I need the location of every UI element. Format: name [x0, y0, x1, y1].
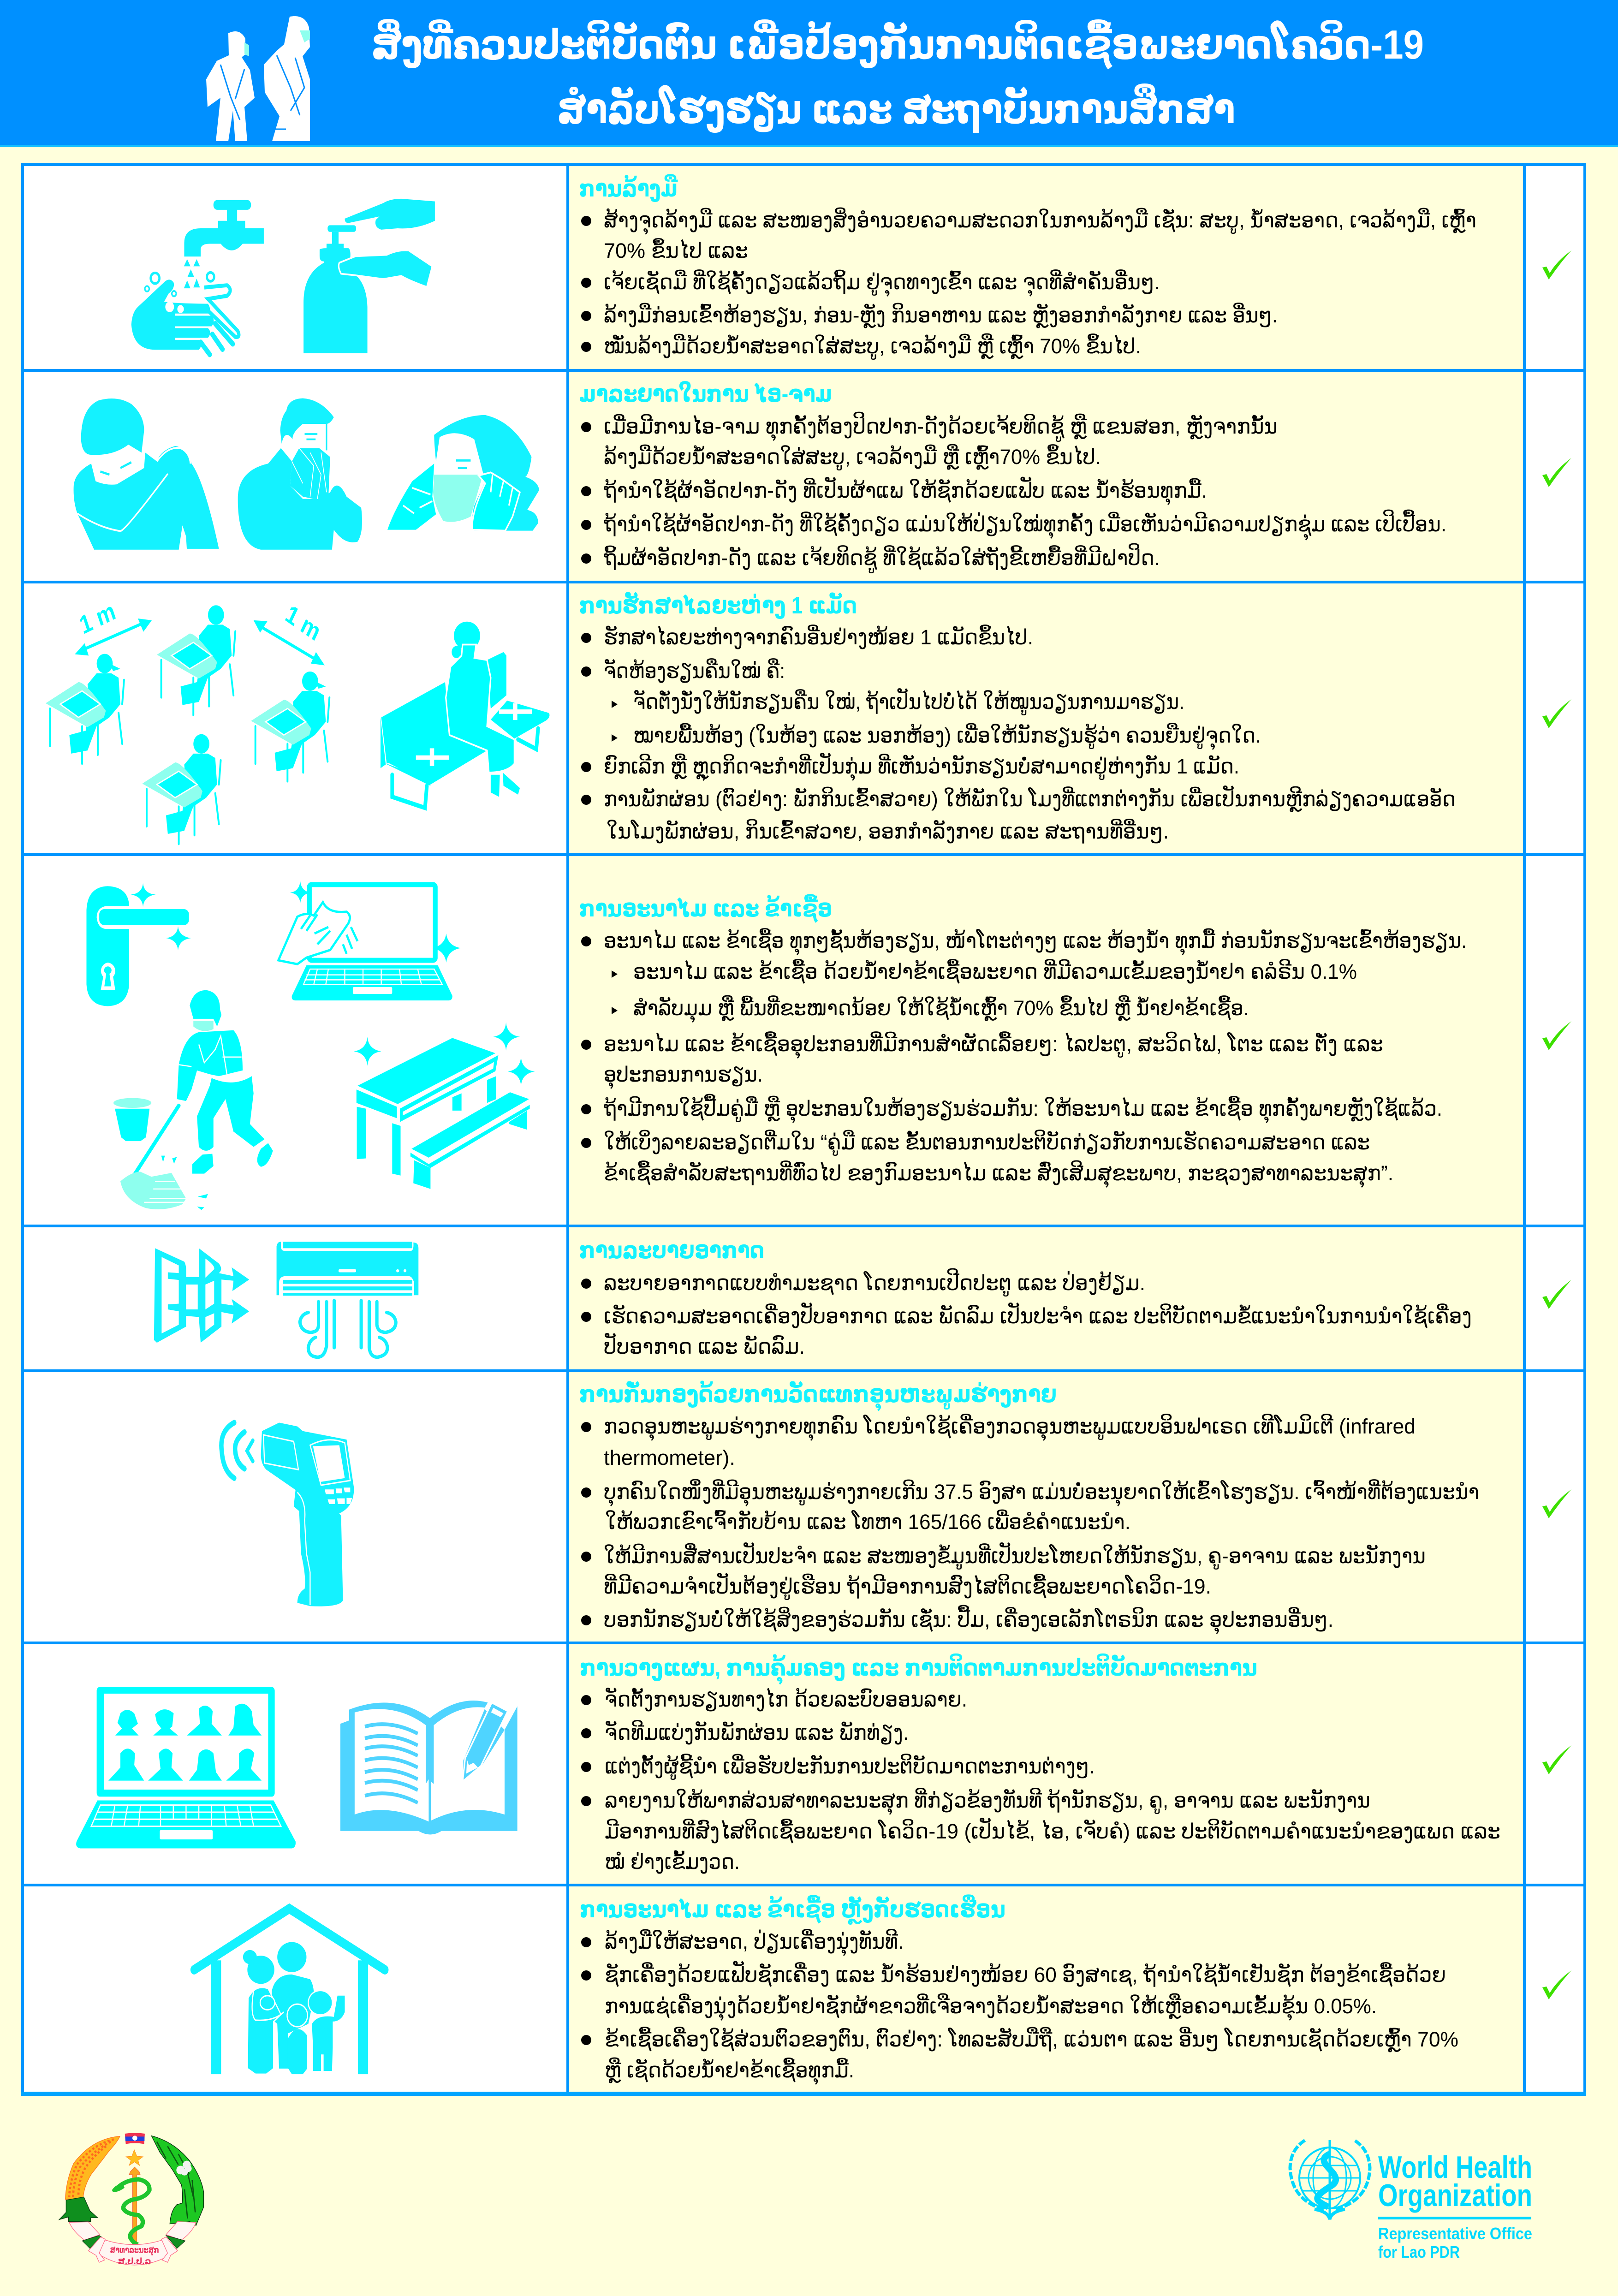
- text: coughing and sneezing guidance: [579, 381, 1446, 573]
- icon: person mopping: [113, 990, 273, 1210]
- text: at home guidance: [580, 1894, 1458, 2085]
- icon: person seated on bench: [381, 622, 549, 808]
- header band: [0, 0, 1618, 147]
- text: physical distancing guidance: [579, 591, 1456, 843]
- panel: temperature screening: [221, 1380, 1571, 1634]
- text: cleaning guidance: ອຸປະກອນການຮຽນ.: [604, 1063, 763, 1089]
- logo: Ministry of Health emblem: [59, 2133, 204, 2266]
- WHO wordmark: for Lao PDR: [1378, 2242, 1460, 2261]
- text: cleaning guidance: ອະນາໄມ ແລະ ຂ້າເຊື້ອ ດ້ວຍນ້ຳຢາຂ້າເຊື້ອພະຍາດ ທີ່ມີຄວາມເຂັ້ມຂອງນ້ຳຢາ ຄລໍຣີນ 0.1%: [633, 959, 1357, 984]
- text: physical distancing guidance: ໃນໂມງພັກຜ່ອນ, ກິນເຂົ້າສວາຍ, ອອກກຳລັງກາຍ ແລະ ສະຖານທີ່ອື່ນໆ.: [607, 819, 1169, 843]
- text: hand washing guidance: ສ້າງຈຸດລ້າງມື ແລະ ສະໜອງສິ່ງອຳນວຍຄວາມສະດວກໃນການລ້າງມື ເຊັ່ນ: ສະບູ, ນ້ຳສະອາດ, ເຈວລ້າງມື, ເຫຼົ້າ: [604, 208, 1476, 235]
- text: hand washing guidance: 70% ຂຶ້ນໄປ ແລະ: [604, 238, 748, 262]
- WHO wordmark: World Health: [1378, 2150, 1532, 2185]
- text: temperature screening guidance: thermometer).: [604, 1446, 735, 1469]
- title: ສຳລັບໂຮງຮຽນ ແລະ ສະຖາບັນການສຶກສາ: [557, 83, 1235, 133]
- icon: laptop video class: [76, 1687, 296, 1849]
- icon: check mark: [1542, 1021, 1571, 1050]
- text: temperature screening guidance: ບອກນັກຮຽນບໍ່ໃຫ້ໃຊ້ສິ່ງຂອງຮ່ວມກັນ ເຊັ່ນ: ປື້ມ, ເຄື່ອງເອເລັກໂຕຣນິກ ແລະ ອຸປະກອນອື່ນໆ.: [604, 1606, 1333, 1634]
- icon: check mark: [1542, 1489, 1571, 1518]
- text: physical distancing guidance: ຮັກສາໄລຍະຫ່າງຈາກຄົນອື່ນຢ່າງໜ້ອຍ 1 ແມັດຂຶ້ນໄປ.: [604, 625, 1033, 649]
- title: ສິ່ງທີ່ຄວນປະຕິບັດຕົນ ເພື່ອປ້ອງກັນການຕິດເຊື້ອພະຍາດໂຄວິດ-19: [371, 18, 1424, 70]
- icon: soap dispenser: [303, 199, 435, 353]
- icon: check mark: [1542, 1970, 1571, 1999]
- icon: person coughing into elbow: [74, 399, 219, 550]
- icon: person sneezing into tissue: [238, 398, 362, 550]
- icon: check mark: [1542, 1745, 1571, 1774]
- logo: World Health Organization: [1290, 2140, 1532, 2261]
- text: planning guidance: ແຕ່ງຕັ້ງຜູ້ຊີ້ນຳ ເພື່ອຮັບປະກັນການປະຕິບັດມາດຕະການຕ່າງໆ.: [605, 1754, 1095, 1780]
- WHO wordmark: Organization: [1378, 2178, 1532, 2213]
- icon: check mark: [1542, 250, 1571, 280]
- student 1: [46, 654, 124, 764]
- text: cleaning guidance: ການອະນາໄມ ແລະ ຂ້າເຊື້ອ: [579, 893, 832, 923]
- panel: cleaning and disinfection: [86, 881, 1571, 1210]
- text: at home guidance: ລ້າງມືໃຫ້ສະອາດ, ປ່ຽນເຄື່ອງນຸ່ງທັນທີ.: [605, 1929, 904, 1956]
- student 4: [142, 734, 221, 844]
- text: cleaning guidance: ສຳລັບມຸມ ຫຼື ພື້ນທີ່ຂະໜາດນ້ອຍ ໃຫ້ໃຊ້ນ້ຳເຫຼົ້າ 70% ຂຶ້ນໄປ ຫຼື ນ້ຳຢາຂ້າເຊື້ອ.: [633, 996, 1249, 1023]
- text: cleaning guidance: ອະນາໄມ ແລະ ຂ້າເຊື້ອ ທຸກໆຊັ້ນຫ້ອງຮຽນ, ໜ້າໂຕະຕ່າງໆ ແລະ ຫ້ອງນ້ຳ ທຸກມື້ ກ່ອນນັກຮຽນຈະເຂົ້າຫ້ອງຮຽນ.: [604, 928, 1467, 955]
- text: hand washing guidance: [579, 173, 1476, 360]
- text: ventilation guidance: ການລະບາຍອາກາດ: [579, 1237, 764, 1263]
- text: ventilation guidance: [579, 1237, 1472, 1358]
- WHO wordmark: [1378, 2150, 1532, 2261]
- icon: students with masks: [206, 16, 310, 141]
- icon: family in house: [194, 1909, 385, 2074]
- text: at home guidance: ການແຊ່ເຄື່ອງນຸ່ງດ້ວຍນ້ຳຢາຊັກຜ້າຂາວທີ່ເຈືອຈາງດ້ວຍນ້ຳສະອາດ ໃຫ້ເຫຼືອຄວາມເຂັ້ມຂຸ້ນ 0.05%.: [605, 1994, 1377, 2021]
- text: physical distancing guidance: ການຮັກສາໄລຍະຫ່າງ 1 ແມັດ: [579, 591, 857, 619]
- icon: students at spaced desks: [46, 596, 329, 844]
- text: planning guidance: ຈັດທີມແບ່ງກັນພັກຜ່ອນ ແລະ ພັກທ່ຽງ.: [605, 1720, 909, 1744]
- text: at home guidance: ການອະນາໄມ ແລະ ຂ້າເຊື້ອ ຫຼັງກັບຮອດເຮືອນ: [580, 1894, 1005, 1925]
- panel: coughing and sneezing etiquette: [74, 381, 1571, 573]
- title: [371, 18, 1424, 133]
- text: physical distancing guidance: ໝາຍພື້ນຫ້ອງ (ໃນຫ້ອງ ແລະ ນອກຫ້ອງ) ເພື່ອໃຫ້ນັກຮຽນຮູ້ວ່າ ຄວນຍືນຢູ່ຈຸດໃດ.: [633, 723, 1261, 750]
- text: temperature screening guidance: ບຸກຄົນໃດໜຶ່ງທີ່ມີອຸນຫະພູມຮ່າງກາຍເກີນ 37.5 ອົງສາ ແມ່ນບໍ່ອະນຸຍາດໃຫ້ເຂົ້າໂຮງຮຽນ. ເຈົ້າໜ້າທີ່ຕ້ອງແນະນຳ: [604, 1480, 1479, 1506]
- text: hand washing guidance: ລ້າງມືກ່ອນເຂົ້າຫ້ອງຮຽນ, ກ່ອນ-ຫຼັງ ກິນອາຫານ ແລະ ຫຼັງອອກກຳລັງກາຍ ແລະ ອື່ນໆ.: [604, 303, 1278, 328]
- logo: Ministry of Health emblem: ສາທາລະນະສຸກ: [110, 2245, 159, 2256]
- icon: check mark: [1542, 458, 1571, 487]
- text: coughing and sneezing guidance: ຖ້ານຳໃຊ້ຜ້າອັດປາກ-ດັງ ທີ່ເປັນຜ້າແພ ໃຫ້ຊັກດ້ວຍແຟັບ ແລະ ນ້ຳຮ້ອນທຸກມື້.: [603, 476, 1207, 505]
- student 2: [157, 605, 235, 715]
- text: temperature screening guidance: [579, 1380, 1479, 1634]
- text: ventilation guidance: ເຮັດຄວາມສະອາດເຄື່ອງປັບອາກາດ ແລະ ພັດລົມ ເປັນປະຈຳ ແລະ ປະຕິບັດຕາມຂໍ້ແນະນຳໃນການນຳໃຊ້ເຄື່ອງ: [604, 1302, 1472, 1328]
- text: physical distancing guidance: ຈັດຕັ່ງນັ່ງໃຫ້ນັກຮຽນຄືນ ໃໝ່, ຖ້າເປັນໄປບໍ່ໄດ້ ໃຫ້ໝູນວຽນການມາຮຽນ.: [633, 688, 1184, 715]
- text: hand washing guidance: ເຈ້ຍເຊັດມື ທີ່ໃຊ້ຄັ້ງດຽວແລ້ວຖິ້ມ ຢູ່ຈຸດທາງເຂົ້າ ແລະ ຈຸດທີ່ສຳຄັນອື່ນໆ.: [604, 270, 1160, 297]
- text: ventilation guidance: ປັບອາກາດ ແລະ ພັດລົມ.: [604, 1332, 805, 1358]
- icon: air conditioner: [277, 1242, 418, 1357]
- distance arrow left: 1 m: [76, 596, 119, 640]
- text: coughing and sneezing guidance: ລ້າງມືດ້ວຍນ້ຳສະອາດໃສ່ສະບູ, ເຈວລ້າງມື ຫຼື ເຫຼົ້າ70% ຂຶ້ນໄປ.: [604, 445, 1101, 470]
- text: coughing and sneezing guidance: ຖິ້ມຜ້າອັດປາກ-ດັງ ແລະ ເຈ້ຍທິດຊູ້ ທີ່ໃຊ້ແລ້ວໃສ່ຖັງຂີ້ເຫຍື້ອທີ່ມີຝາປິດ.: [603, 544, 1160, 573]
- text: at home guidance: ຫຼື ເຊັດດ້ວຍນ້ຳຢາຂ້າເຊື້ອທຸກມື້.: [605, 2058, 854, 2085]
- text: physical distancing guidance: ການພັກຜ່ອນ (ຕົວຢ່າງ: ພັກກິນເຂົ້າສວາຍ) ໃຫ້ພັກໃນ ໂມງທີ່ແຕກຕ່າງກັນ ເພື່ອເປັນການຫຼີກລ່ຽງຄວາມແອອັດ: [604, 785, 1456, 812]
- text: planning guidance: ມີອາການທີ່ສົງໄສຕິດເຊື້ອພະຍາດ ໂຄວິດ-19 (ເປັນໄຂ້, ໄອ, ເຈັບຄໍ) ແລະ ປະຕິບັດຕາມຄຳແນະນຳຂອງແພດ ແລະ: [605, 1817, 1500, 1844]
- text: temperature screening guidance: ໃຫ້ພວກເຂົາເຈົ້າກັບບ້ານ ແລະ ໂທຫາ 165/166 ເພື່ອຂໍຄຳແນະນຳ.: [605, 1510, 1130, 1534]
- text: cleaning guidance: ອະນາໄມ ແລະ ຂ້າເຊື້ອອຸປະກອນທີ່ມີການສຳຜັດເລື້ອຍໆ: ໄລປະຕູ, ສະວິດໄຟ, ໂຕະ ແລະ ຕັ່ງ ແລະ: [604, 1032, 1383, 1059]
- icon: open window with airflow: [154, 1248, 249, 1343]
- distance arrow right: 1 m: [281, 600, 325, 646]
- text: planning guidance: ການວາງແຜນ, ການຄຸ້ມຄອງ ແລະ ການຕິດຕາມການປະຕິບັດມາດຕະການ: [580, 1653, 1257, 1685]
- icon: check mark: [1542, 699, 1571, 728]
- icon: clean table and bench: [354, 1022, 535, 1189]
- text: at home guidance: ຂ້າເຊື້ອເຄື່ອງໃຊ້ສ່ວນຕົວຂອງຕົນ, ຕົວຢ່າງ: ໂທລະສັບມືຖື, ແວ່ນຕາ ແລະ ອື່ນໆ ໂດຍການເຊັດດ້ວຍເຫຼົ້າ 70%: [605, 2027, 1458, 2052]
- text: coughing and sneezing guidance: ເມື່ອມີການໄອ-ຈາມ ທຸກຄັ້ງຕ້ອງປິດປາກ-ດັງດ້ວຍເຈ້ຍທິດຊູ້ ຫຼື ແຂນສອກ, ຫຼັງຈາກນັ້ນ: [604, 412, 1278, 442]
- text: cleaning guidance: ໃຫ້ເບິ່ງລາຍລະອຽດຕື່ມໃນ “ຄູ່ມື ແລະ ຂັ້ນຕອນການປະຕິບັດກ່ຽວກັບການເຮັດຄວາມສະອາດ ແລະ: [604, 1130, 1370, 1156]
- panel: physical distancing: [46, 591, 1571, 844]
- text: physical distancing guidance: ຈັດຫ້ອງຮຽນຄືນໃໝ່ ຄື:: [604, 659, 785, 683]
- text: temperature screening guidance: ທີ່ມີຄວາມຈຳເປັນຕ້ອງຢູ່ເຮືອນ ຖ້າມີອາການສົງໄສຕິດເຊື້ອພະຍາດໂຄວິດ-19.: [604, 1572, 1211, 1600]
- text: planning guidance: ໝໍ ຢ່າງເຂັ້ມງວດ.: [605, 1850, 740, 1874]
- text: ventilation guidance: ລະບາຍອາກາດແບບທຳມະຊາດ ໂດຍການເປີດປະຕູ ແລະ ປ່ອງຢ້ຽມ.: [604, 1269, 1145, 1297]
- text: temperature screening guidance: ການກັ່ນກອງດ້ວຍການວັດແທກອຸນຫະພູມຮ່າງກາຍ: [579, 1380, 1057, 1412]
- WHO wordmark: Representative Office: [1378, 2224, 1532, 2243]
- text: planning guidance: [580, 1653, 1500, 1874]
- icon: check mark: [1542, 1280, 1571, 1309]
- text: planning guidance: ລາຍງານໃຫ້ພາກສ່ວນສາທາລະນະສຸກ ທີ່ກ່ຽວຂ້ອງທັນທີ ຖ້ານັກຮຽນ, ຄູ, ອາຈານ ແລະ ພະນັກງານ: [605, 1788, 1370, 1815]
- text: temperature screening guidance: ກວດອຸນຫະພູມຮ່າງກາຍທຸກຄົນ ໂດຍນຳໃຊ້ເຄື່ອງກວດອຸນຫະພູມແບບອິນຟາເຣດ ເທີໂມມິເຕີ (infrared: [604, 1414, 1416, 1441]
- icon: tap and washing hands: [131, 200, 264, 355]
- icon: door handle: [86, 883, 191, 1006]
- text: planning guidance: ຈັດຕັ້ງການຮຽນທາງໄກ ດ້ວຍລະບົບອອນລາຍ.: [605, 1687, 967, 1711]
- logo: Ministry of Health emblem: ສ.ປ.ປ.ລ: [118, 2256, 151, 2266]
- panel: ventilation: [154, 1237, 1571, 1358]
- text: coughing and sneezing guidance: ຖ້ານຳໃຊ້ຜ້າອັດປາກ-ດັງ ທີ່ໃຊ້ຄັ້ງດຽວ ແມ່ນໃຫ້ປ່ຽນໃໝ່ທຸກຄັ້ງ ເມື່ອເຫັນວ່າມີຄວາມປຽກຊຸ່ມ ແລະ ເປິເປື້ອນ.: [603, 510, 1446, 541]
- panel: hand washing: [131, 173, 1571, 360]
- text: cleaning guidance: ຖ້າມີການໃຊ້ປື້ມຄູ່ມື ຫຼື ອຸປະກອນໃນຫ້ອງຮຽນຮ່ວມກັນ: ໃຫ້ອະນາໄມ ແລະ ຂ້າເຊື້ອ ທຸກຄັ້ງພາຍຫຼັງໃຊ້ແລ້ວ.: [603, 1094, 1442, 1123]
- text: cleaning guidance: ຂ້າເຊື້ອສຳລັບສະຖານທີ່ທົ່ວໄປ ຂອງກົມອະນາໄມ ແລະ ສົ່ງເສີມສຸຂະພາບ, ກະຊວງສາທາລະນະສຸກ”.: [604, 1161, 1393, 1188]
- text: hand washing guidance: ໝັ່ນລ້າງມືດ້ວຍນ້ຳສະອາດໃສ່ສະບູ, ເຈວລ້າງມື ຫຼື ເຫຼົ້າ 70% ຂຶ້ນໄປ.: [604, 334, 1141, 360]
- icon: infrared thermometer: [221, 1422, 354, 1606]
- student 3: [251, 672, 329, 781]
- panel: at home after returning: [194, 1894, 1571, 2085]
- icon: open book and pen: [340, 1701, 518, 1834]
- distance arrow right: [254, 600, 325, 665]
- text: temperature screening guidance: ໃຫ້ມີການສື່ສານເປັນປະຈຳ ແລະ ສະໜອງຂໍ້ມູນທີ່ເປັນປະໂຫຍດໃຫ້ນັກຮຽນ, ຄູ-ອາຈານ ແລະ ພະນັກງານ: [604, 1542, 1426, 1570]
- panel: planning and monitoring: [76, 1653, 1571, 1874]
- icon: person putting on mask: [387, 415, 539, 531]
- text: coughing and sneezing guidance: ມາລະຍາດໃນການ ໄອ-ຈາມ: [579, 381, 832, 407]
- distance arrow left: [75, 596, 152, 655]
- text: hand washing guidance: ການລ້າງມື: [579, 173, 678, 202]
- text: cleaning guidance: [579, 893, 1467, 1188]
- text: at home guidance: ຊັກເຄື່ອງດ້ວຍແຟັບຊັກເຄື່ອງ ແລະ ນ້ຳຮ້ອນຢ່າງໜ້ອຍ 60 ອົງສາເຊ, ຖ້ານຳໃຊ້ນ້ຳເຢັນຊັກ ຕ້ອງຂ້າເຊື້ອດ້ວຍ: [605, 1960, 1446, 1987]
- text: physical distancing guidance: ຍົກເລີກ ຫຼື ຫຼຸດກິດຈະກຳທີ່ເປັນກຸ່ມ ທີ່ເຫັນວ່ານັກຮຽນບໍ່ສາມາດຢູ່ຫ່າງກັນ 1 ແມັດ.: [604, 752, 1239, 781]
- icon: wiping laptop: [279, 881, 461, 1000]
- WHO emblem: [1290, 2140, 1370, 2219]
